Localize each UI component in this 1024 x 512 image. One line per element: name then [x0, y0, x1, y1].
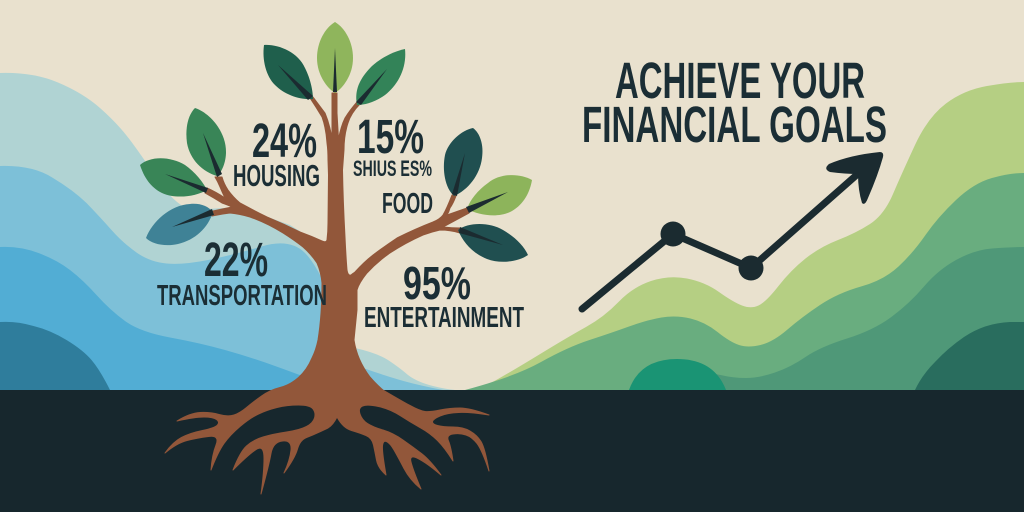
title: ACHIEVE YOUR — [615, 52, 865, 109]
stat: 24% housing: 24% — [252, 115, 317, 168]
label: food: FOOD — [382, 188, 433, 220]
blue hills on the left — [0, 73, 455, 390]
stat: 24% housing: HOUSING — [233, 159, 320, 193]
leaf: right top — [444, 128, 483, 196]
stat: 22% transportation: TRANSPORTATION — [157, 280, 327, 312]
leaf: upper right — [356, 49, 405, 105]
green hills on the right — [465, 82, 1024, 390]
stat: 15%: 15% — [357, 111, 424, 164]
leaf: upper left — [263, 45, 313, 99]
leaf midribs — [165, 48, 508, 245]
stat: 95% entertainment: 95% — [403, 257, 471, 309]
stat: 22% transportation: 22% — [204, 234, 268, 287]
budget labels — [157, 111, 524, 334]
leaf: left lower teal — [146, 204, 213, 245]
stat: 15% — [353, 111, 432, 181]
tree trunk, branches and roots — [165, 93, 489, 494]
stat: 95% entertainment: ENTERTAINMENT — [364, 302, 524, 334]
leaves — [140, 22, 532, 262]
title — [582, 52, 887, 153]
growth arrow chart — [582, 152, 883, 309]
stat: 15%: SHIUS ES% — [353, 156, 432, 181]
stat: 24% housing — [233, 115, 320, 193]
stat: 22% transportation — [157, 234, 327, 312]
dark ground band — [0, 390, 1024, 512]
leaf: right middle — [467, 175, 532, 215]
leaf: left middle — [140, 158, 207, 197]
leaf: right bottom — [458, 224, 528, 262]
leaf: left top — [186, 108, 226, 176]
stat: 95% entertainment — [364, 257, 524, 334]
leaf: top centre — [317, 22, 353, 93]
